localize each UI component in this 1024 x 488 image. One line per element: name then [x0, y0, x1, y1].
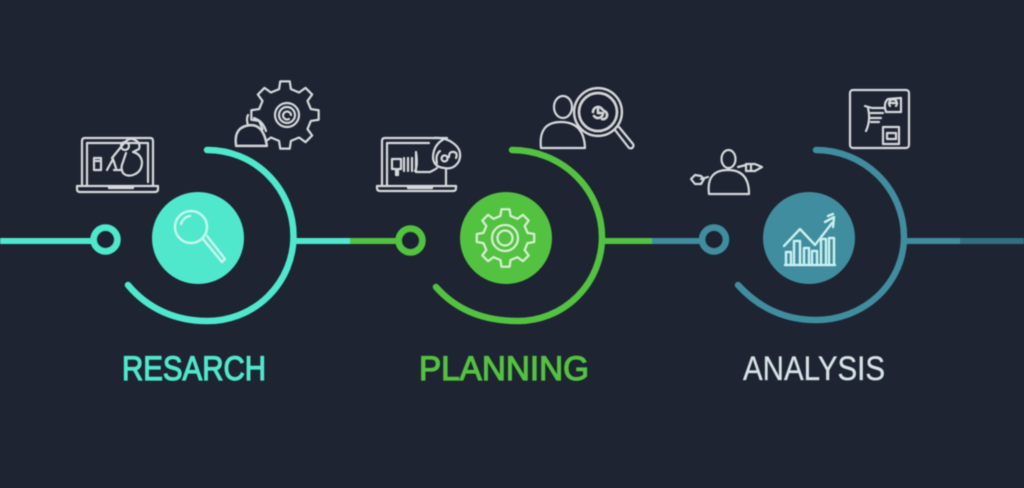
connector: research incoming line	[0, 238, 92, 244]
arc: research	[128, 150, 294, 321]
panel: analysis step	[652, 90, 1024, 320]
icon: person with plugs	[691, 150, 762, 194]
node ring: research	[94, 228, 118, 252]
icon: laptop with bar chart and swirl	[377, 138, 460, 191]
icon: planning gear badge	[460, 192, 552, 284]
label: analysis: ANALYSIS	[743, 350, 885, 388]
icon: research magnifier badge	[152, 192, 244, 284]
connector: planning outgoing line	[604, 238, 652, 244]
panel: research step	[0, 81, 350, 321]
icon: laptop with charts	[77, 138, 158, 192]
icon: framed workflow diagram	[850, 90, 909, 148]
label: research: RESARCH	[122, 350, 266, 388]
connector: research outgoing line	[296, 238, 350, 244]
connector: planning incoming line	[350, 238, 398, 244]
label: planning: PLANNING	[419, 350, 589, 388]
node ring: analysis	[702, 228, 726, 252]
icon: person with magnifier	[541, 88, 634, 148]
arc: analysis	[738, 150, 904, 320]
arc: planning	[436, 150, 602, 321]
panel: planning step	[350, 88, 652, 321]
connector: analysis incoming line	[652, 238, 701, 244]
connector: analysis outgoing line	[906, 238, 960, 244]
icon: person with gear	[236, 81, 319, 149]
icon: analysis chart badge	[763, 192, 855, 284]
node ring: planning	[398, 228, 422, 252]
